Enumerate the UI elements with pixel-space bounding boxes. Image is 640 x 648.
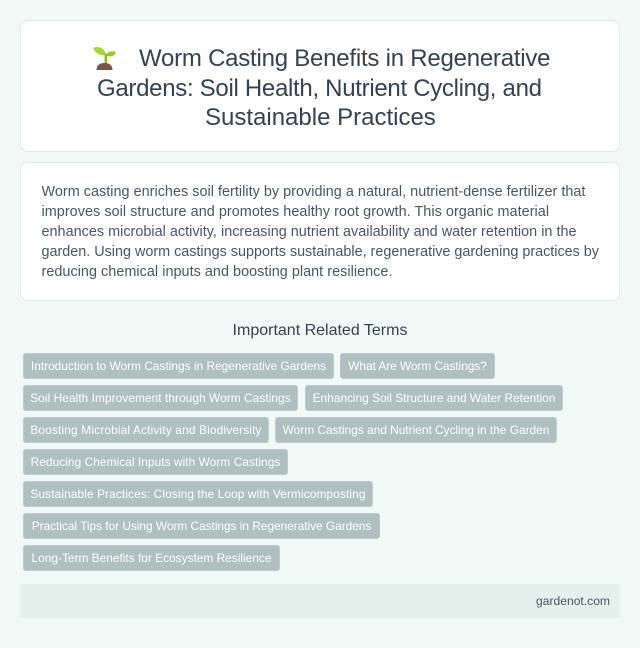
tag	[23, 385, 298, 411]
icon: seedling	[93, 47, 116, 70]
tag	[23, 513, 380, 539]
tag: What Are Worm Castings?	[348, 359, 487, 373]
tag: Reducing Chemical Inputs with Worm Castings	[31, 455, 280, 469]
tag: Long-Term Benefits for Ecosystem Resilience	[32, 551, 271, 565]
tag: Sustainable Practices: Closing the Loop with Vermicomposting	[30, 487, 366, 501]
tag	[23, 353, 334, 379]
title text: Gardens: Soil Health, Nutrient Cycling, and	[97, 75, 542, 102]
tag	[23, 449, 288, 475]
tag	[23, 545, 280, 571]
description text: improves soil structure and promotes healthy root growth. This organic material	[42, 204, 549, 220]
tag	[340, 353, 495, 379]
footer text: gardenot.com	[536, 594, 610, 608]
tag: Enhancing Soil Structure and Water Retention	[313, 391, 555, 405]
tag: Soil Health Improvement through Worm Castings	[30, 391, 291, 405]
description text: enhances microbial activity, increasing nutrient availability and water retention in the	[42, 224, 577, 240]
description panel	[20, 162, 620, 301]
tag: Introduction to Worm Castings in Regenerative Gardens	[31, 359, 326, 373]
title text: Sustainable Practices	[205, 104, 436, 131]
title panel	[20, 20, 620, 152]
section heading: Important Related Terms	[233, 322, 407, 339]
description text: garden. Using worm castings supports sustainable, regenerative gardening practices by	[42, 244, 599, 260]
description text	[42, 184, 599, 280]
tag	[23, 481, 373, 507]
tag: Boosting Microbial Activity and Biodiversity	[30, 423, 262, 437]
tag: Worm Castings and Nutrient Cycling in the Garden	[283, 423, 549, 437]
tag	[305, 385, 563, 411]
related terms tags	[23, 353, 563, 571]
tag	[23, 417, 269, 443]
description text: reducing chemical inputs and boosting plant resilience.	[42, 264, 392, 280]
title text	[97, 45, 550, 131]
tag: Practical Tips for Using Worm Castings in Regenerative Gardens	[32, 519, 371, 533]
description text: Worm casting enriches soil fertility by providing a natural, nutrient-dense fertilizer that	[42, 184, 585, 200]
tag	[275, 417, 557, 443]
footer bar	[20, 584, 620, 618]
title text: Worm Casting Benefits in Regenerative	[139, 45, 550, 72]
